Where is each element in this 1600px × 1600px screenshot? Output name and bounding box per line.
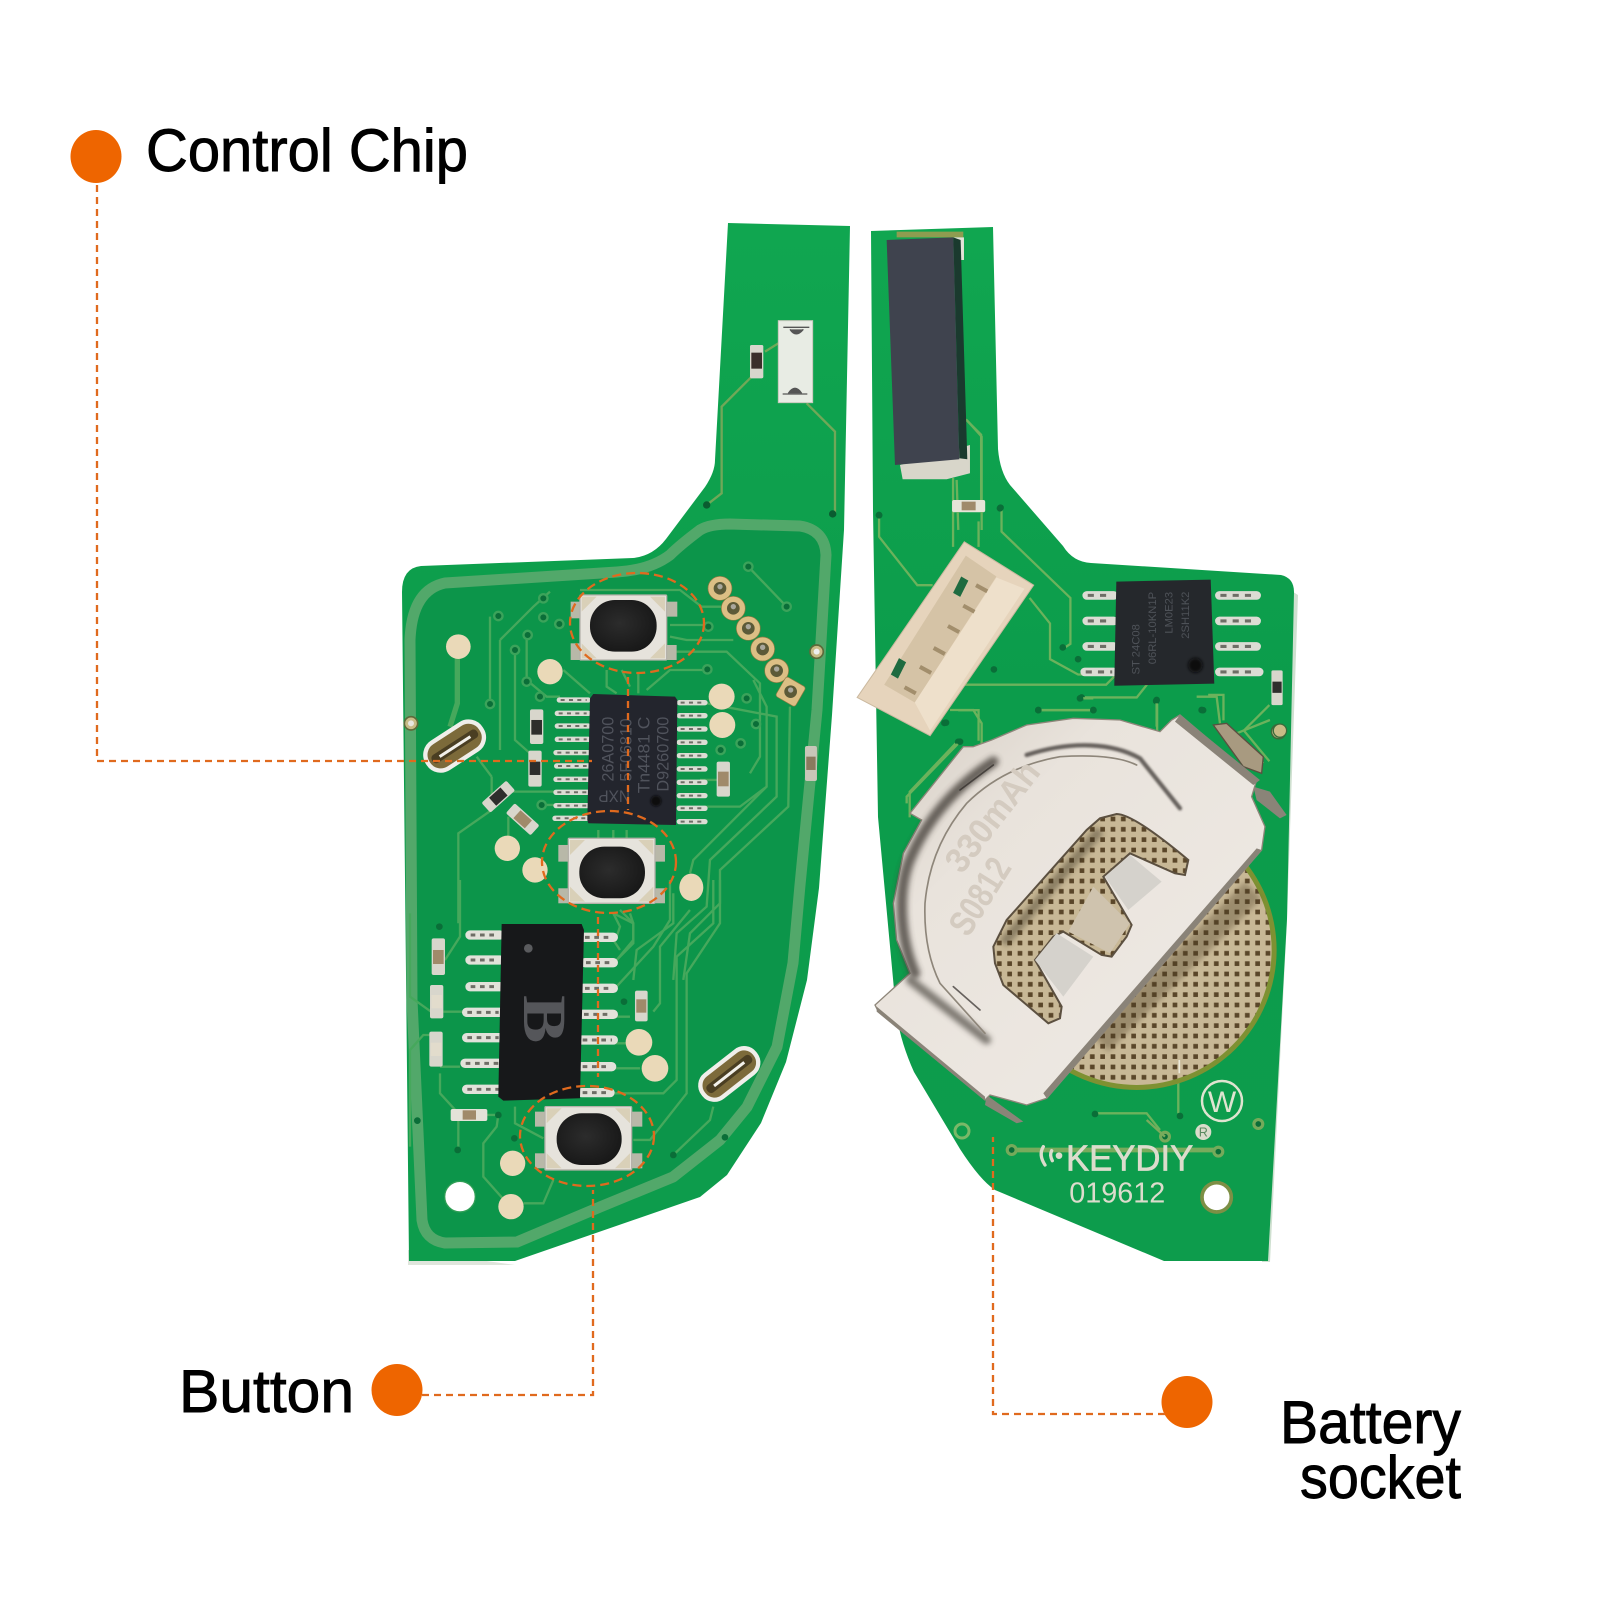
board number: 019612 xyxy=(1069,1178,1165,1210)
vias xyxy=(490,567,787,805)
vias xyxy=(707,505,833,514)
8-pin chip: 2SH11K2 xyxy=(1180,592,1192,639)
trace xyxy=(1147,1120,1165,1137)
heading: battery socket: Battery xyxy=(1280,1389,1461,1456)
upper section details xyxy=(707,321,835,514)
KEYDIY logo: KEYDIY xyxy=(1066,1138,1193,1179)
W certification mark: W xyxy=(1208,1086,1237,1119)
callout: button xyxy=(179,1190,593,1425)
small SMD resistor xyxy=(952,500,985,512)
traces xyxy=(458,567,790,980)
vias xyxy=(879,508,1203,742)
chip markings: 5F06810 xyxy=(617,718,636,782)
LED xyxy=(778,321,813,403)
LED resistor xyxy=(750,345,763,378)
board outline xyxy=(871,227,1294,1261)
via holes xyxy=(1012,1124,1258,1152)
callout highlight: button 2 ring xyxy=(542,811,676,913)
chip markings: NXP xyxy=(598,787,630,806)
lower section details xyxy=(410,880,764,1219)
crystal contact 1 xyxy=(420,716,490,776)
via holes xyxy=(490,567,787,805)
small resistors xyxy=(481,709,817,835)
small resistors xyxy=(429,938,648,1121)
B chip xyxy=(465,924,613,1101)
lower board markings xyxy=(1012,1120,1258,1212)
edge via xyxy=(1273,724,1287,737)
solder tab xyxy=(1213,723,1263,773)
8-pin chip: ST 24C08 xyxy=(1130,624,1142,674)
board edge sliver xyxy=(1262,590,1298,1262)
embossed holder text: S0812 xyxy=(940,850,1019,943)
gold test pads xyxy=(446,634,735,901)
button 2 xyxy=(558,838,665,903)
holder edge bevels xyxy=(877,715,1262,1101)
window dark sheen xyxy=(1003,830,1100,943)
central metal tab xyxy=(1068,887,1130,953)
traces over board xyxy=(857,419,1286,817)
8-pin chip: 06RL-10KN1P xyxy=(1147,592,1159,664)
leader line xyxy=(422,1190,593,1395)
edge vias xyxy=(404,645,823,730)
coin battery xyxy=(997,810,1277,1090)
pad trace xyxy=(450,653,457,727)
callout: battery socket xyxy=(993,1137,1461,1511)
antenna coil xyxy=(879,232,1000,530)
board edge sliver xyxy=(408,1250,515,1265)
8-pin chip xyxy=(1085,580,1259,686)
chip markings: 26A0700 xyxy=(598,717,617,782)
chip markings: D9260700 xyxy=(653,717,672,792)
board outline xyxy=(402,223,850,1261)
right circuit board (battery side) xyxy=(70,117,1461,1511)
marker dot xyxy=(70,130,122,183)
vias xyxy=(417,927,725,1155)
button 1 xyxy=(571,595,677,660)
green traces around holder xyxy=(907,697,1270,1130)
callout highlight: button 1 ring xyxy=(570,573,704,673)
traces xyxy=(707,343,835,513)
holder window xyxy=(993,814,1188,1023)
holder shading xyxy=(902,745,1180,1040)
logo trace xyxy=(1012,1143,1218,1157)
callout: control chip xyxy=(70,117,592,761)
control chip xyxy=(555,694,705,825)
registered mark: R xyxy=(1199,1126,1208,1140)
lower silver strip xyxy=(1035,933,1093,997)
signal icon xyxy=(1041,1147,1061,1165)
white connector xyxy=(857,542,1034,736)
leader line xyxy=(97,185,592,761)
via ring xyxy=(955,1124,969,1138)
vias xyxy=(1012,1124,1258,1152)
8-pin chip: LM0E23 xyxy=(1163,592,1175,634)
button connector lines xyxy=(598,677,628,1077)
small resistor xyxy=(1271,670,1283,705)
registered mark xyxy=(1195,1124,1211,1140)
heading: control chip: Control Chip xyxy=(146,117,468,184)
B chip: B xyxy=(510,995,578,1043)
edge via xyxy=(1271,724,1286,739)
holder pin bottom xyxy=(985,1095,1023,1123)
heading: button: Button xyxy=(179,1358,354,1425)
heading line 2: socket xyxy=(1300,1444,1461,1511)
mounting hole xyxy=(445,1181,475,1212)
button 3 xyxy=(535,1107,642,1170)
gold test pads xyxy=(498,1029,668,1219)
crystal contact 2 xyxy=(695,1043,764,1105)
main section details xyxy=(404,567,823,980)
embossed holder text: 330mAh xyxy=(937,753,1048,880)
board inner area and copper band xyxy=(410,524,826,1243)
leader line xyxy=(993,1137,1165,1414)
embossed holder text xyxy=(937,753,1048,943)
W certification mark xyxy=(1202,1081,1242,1121)
six-pin header xyxy=(708,576,806,707)
marker dot xyxy=(1162,1376,1212,1428)
holder body xyxy=(875,715,1265,1105)
silver strips xyxy=(1105,855,1162,910)
marker dot xyxy=(372,1364,422,1416)
chip markings xyxy=(598,717,672,806)
mounting hole xyxy=(1202,1183,1231,1212)
left circuit board (button side) xyxy=(402,223,850,1265)
traces xyxy=(410,880,720,1207)
battery and holder xyxy=(875,697,1287,1130)
holder pin top xyxy=(1253,787,1287,818)
callout highlight: button 3 ring xyxy=(520,1086,654,1186)
chip markings: Tn4481 C xyxy=(634,717,653,793)
